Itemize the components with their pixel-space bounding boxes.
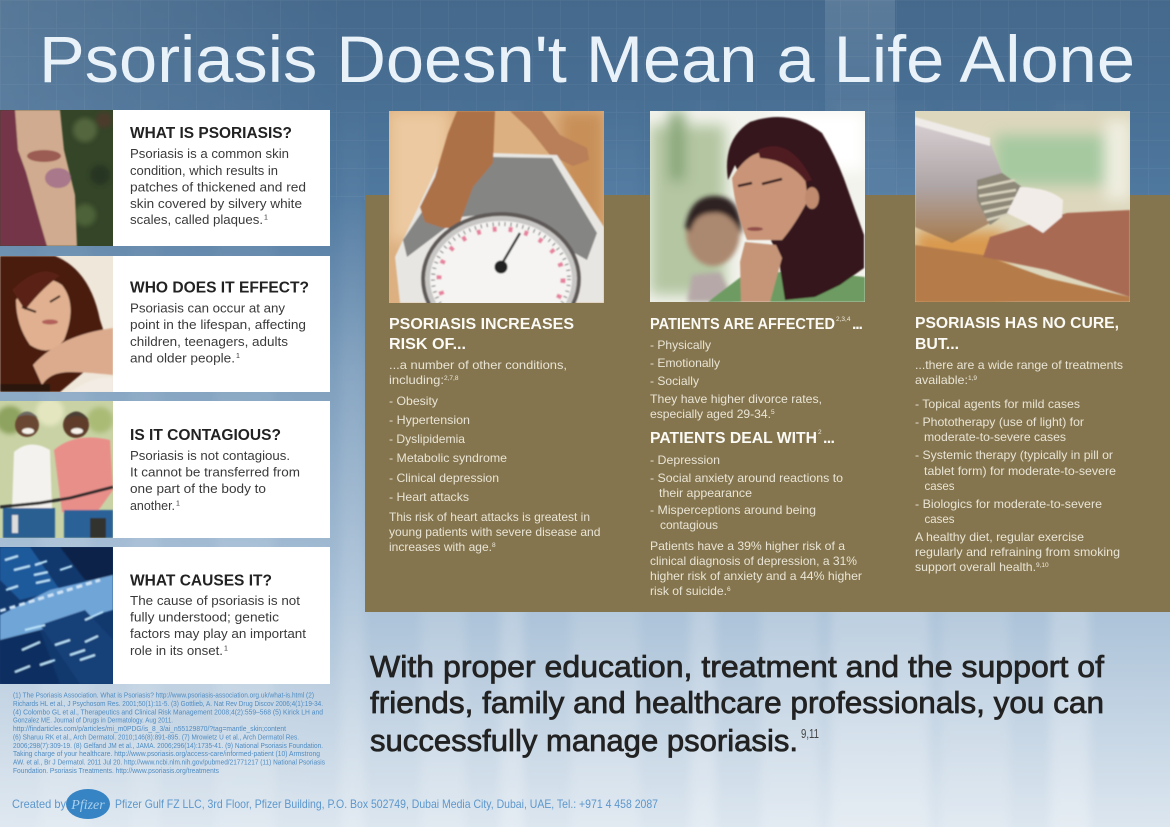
card text: [113, 256, 330, 392]
photo: ointment tube on a finger: [915, 111, 1130, 305]
panel: what is psoriasis: [0, 110, 330, 246]
column: no cure, treatments: cases: [924, 513, 955, 526]
icon: Pfizer logo: Pfizer: [70, 798, 105, 813]
card text: 1: [176, 500, 180, 508]
column: patients affected: - Emotionally: [650, 357, 720, 370]
references: [13, 690, 325, 775]
closing statement: successfully manage psoriasis.: [370, 723, 798, 758]
closing statement: With proper education, treatment and the support of: [370, 649, 1104, 684]
card text: 1: [264, 214, 268, 222]
column: no cure, treatments: 9,10: [1036, 562, 1049, 569]
card text: skin covered by silvery white: [130, 196, 302, 211]
card text: WHAT CAUSES IT?: [130, 573, 272, 590]
card text: IS IT CONTAGIOUS?: [130, 427, 281, 444]
column: no cure, treatments: BUT...: [915, 336, 959, 353]
column: patients affected: 2: [818, 429, 822, 436]
card text: point in the lifespan, affecting: [130, 317, 306, 332]
card text: one part of the body to: [130, 481, 266, 496]
column: patients affected: PATIENTS DEAL WITH: [650, 430, 817, 447]
card text: 1: [224, 646, 228, 652]
card text: Psoriasis is not contagious.: [130, 448, 290, 463]
photo: feet on bathroom scale: [389, 111, 604, 303]
references: AW. et al., Br J Dermatol. 2011 Jul 20. http://www.ncbi.nlm.nih.gov/pubmed/21771217 (11) National Psoriasis: [13, 758, 325, 766]
column: psoriasis increases risk: - Obesity: [389, 395, 438, 408]
column: patients affected: risk of suicide.: [650, 585, 727, 598]
closing statement: 9,11: [801, 726, 819, 741]
column: patients affected: 5: [771, 409, 775, 416]
column: patients affected: They have higher divorce rates,: [650, 393, 822, 406]
column: patients affected: their appearance: [659, 487, 752, 500]
column: psoriasis increases risk: - Dyslipidemia: [389, 433, 466, 446]
column: psoriasis increases risk: 8: [492, 542, 496, 549]
column: psoriasis increases risk: young patients with severe disease and: [389, 526, 600, 539]
column: patients affected: especially aged 29-34.: [650, 408, 771, 421]
column: psoriasis increases risk: RISK OF...: [389, 336, 466, 353]
footer: created by: Created by: [12, 797, 66, 811]
closing statement: [370, 649, 1104, 758]
column: no cure, treatments: tablet form) for moderate-to-severe: [924, 465, 1116, 478]
panel: is it contagious: [0, 398, 330, 538]
column: psoriasis increases risk: 2,7,8: [444, 375, 459, 382]
references: Foundation. Psoriasis Treatments. http://www.psoriasis.org/treatments: [13, 766, 219, 775]
panel: who does it effect: [0, 256, 330, 392]
column: patients affected: clinical diagnosis of depression, a 31%: [650, 555, 857, 568]
card text: fully understood; genetic: [130, 610, 280, 625]
card text: [113, 547, 330, 684]
column: psoriasis increases risk: including:: [389, 374, 444, 387]
card text: another.: [130, 498, 175, 513]
column: psoriasis increases risk: This risk of heart attacks is greatest in: [389, 511, 590, 524]
column: patients affected: 6: [727, 586, 731, 593]
column: no cure, treatments: [915, 315, 1123, 574]
column: no cure, treatments: - Phototherapy (use of light) for: [915, 416, 1084, 429]
photo: couple on bicycles: [0, 398, 113, 538]
footer: created by: Pfizer Gulf FZ LLC, 3rd Floor, Pfizer Building, P.O. Box 502749, Dubai Media City, Dubai, UAE, Tel.: +971 4 458 2087: [115, 797, 658, 811]
column: no cure, treatments: A healthy diet, regular exercise: [915, 531, 1084, 544]
column: patients affected: contagious: [660, 519, 718, 532]
column: no cure, treatments: 1,9: [968, 375, 977, 382]
card text: [113, 401, 330, 538]
card text: patches of thickened and red: [130, 180, 306, 195]
column: patients affected: - Social anxiety around reactions to: [650, 472, 843, 485]
card text: factors may play an important: [130, 626, 306, 641]
panel: what causes it: [0, 547, 330, 684]
references: Gonzalez ME. Journal of Drugs in Dermatology. Aug 2011.: [13, 716, 173, 725]
column: no cure, treatments: - Systemic therapy (typically in pill or: [915, 449, 1113, 462]
column: no cure, treatments: cases: [924, 480, 955, 493]
photo: thoughtful woman with man behind: [650, 111, 865, 302]
photo: young woman looking at her hand: [0, 256, 113, 392]
card text: role in its onset.: [130, 643, 223, 658]
card text: children, teenagers, adults: [130, 334, 289, 349]
references: (1) The Psoriasis Association. What is Psoriasis? http://www.psoriasis-association.org.uk/what-is.html (2): [13, 690, 314, 700]
card text: 1: [236, 353, 240, 360]
card text: The cause of psoriasis is not: [130, 593, 300, 608]
card text: WHAT IS PSORIASIS?: [130, 125, 292, 142]
column: no cure, treatments: moderate-to-severe cases: [924, 431, 1066, 444]
photo: arm with plaque: [0, 110, 113, 246]
column: patients affected: - Misperceptions around being: [650, 504, 816, 517]
references: (6) Sharuu RK et al., Arch Dermatol. 2010;146(8):891-895. (7) Mrowietz U et al., Arch Dermatol Res.: [13, 732, 299, 741]
column: patients affected: ...: [823, 430, 835, 447]
column: no cure, treatments: PSORIASIS HAS NO CURE,: [915, 315, 1119, 332]
footer: created by: [12, 789, 658, 819]
card text: [113, 110, 330, 246]
column: psoriasis increases risk: - Metabolic syndrome: [389, 452, 507, 465]
column: psoriasis increases risk: - Hypertension: [389, 414, 470, 427]
closing statement: friends, family and healthcare professionals, you can: [370, 685, 1104, 720]
title: Psoriasis Doesn't Mean a Life Alone: [39, 22, 1135, 96]
column: patients affected: higher risk of anxiety and a 44% higher: [650, 570, 862, 583]
column: patients affected: Patients have a 39% higher risk of a: [650, 540, 846, 553]
icon: Pfizer logo: [66, 789, 110, 819]
references: 2006;298(7):309-19. (8) Gelfand JM et al., JAMA. 2006;296(14):1735-41. (9) National Psoriasis Foundation.: [13, 741, 323, 750]
column: no cure, treatments: regularly and refraining from smoking: [915, 546, 1120, 559]
column: no cure, treatments: - Biologics for moderate-to-severe: [915, 498, 1102, 511]
card text: condition, which results in: [130, 163, 278, 178]
card text: WHO DOES IT EFFECT?: [130, 280, 309, 297]
column: patients affected: - Socially: [650, 375, 699, 388]
references: Richards HL et al., J Psychosom Res. 2001;50(1):11-5. (3) Gottlieb, A. Nat Rev Drug Discov 2006;4(1):19-34.: [13, 699, 323, 708]
column: patients affected: 2,3,4: [836, 316, 851, 323]
card text: and older people.: [130, 351, 235, 366]
column: psoriasis increases risk: - Clinical depression: [389, 472, 499, 485]
column: psoriasis increases risk: ...a number of other conditions,: [389, 359, 567, 372]
column: patients affected: - Depression: [650, 454, 720, 467]
column: patients affected: - Physically: [650, 339, 711, 352]
photo: DNA gel bands: [0, 547, 113, 684]
card text: It cannot be transferred from: [130, 465, 300, 480]
column: no cure, treatments: - Topical agents for mild cases: [915, 398, 1080, 411]
column: no cure, treatments: ...there are a wide range of treatments: [915, 359, 1123, 372]
card text: Psoriasis is a common skin: [130, 146, 289, 161]
card text: Psoriasis can occur at any: [130, 301, 286, 316]
references: http://findarticles.com/p/articles/mi_m0PDG/is_8_3/ai_n55129870/?tag=mantle_skin;content: [13, 724, 287, 733]
column: psoriasis increases risk: increases with age.: [389, 541, 492, 554]
column: patients affected: [650, 316, 863, 598]
column: psoriasis increases risk: [389, 316, 600, 554]
column: no cure, treatments: support overall health.: [915, 561, 1036, 574]
column: patients affected: ...: [852, 316, 863, 333]
column: no cure, treatments: available:: [915, 374, 968, 387]
card text: scales, called plaques.: [130, 212, 263, 227]
column: psoriasis increases risk: PSORIASIS INCREASES: [389, 316, 574, 333]
column: psoriasis increases risk: - Heart attacks: [389, 491, 469, 504]
column: patients affected: PATIENTS ARE AFFECTED: [650, 316, 835, 333]
references: (4) Colombo GL et al., Therapeutics and Clinical Risk Management 2008;4(2):559–568 (5) Kirick LH and: [13, 707, 323, 716]
references: Taking charge of your healthcare. http://www.psoriasis.org/access-care/informed-patient (10) Armstrong: [13, 749, 320, 758]
panel: brown background: [365, 195, 1170, 612]
